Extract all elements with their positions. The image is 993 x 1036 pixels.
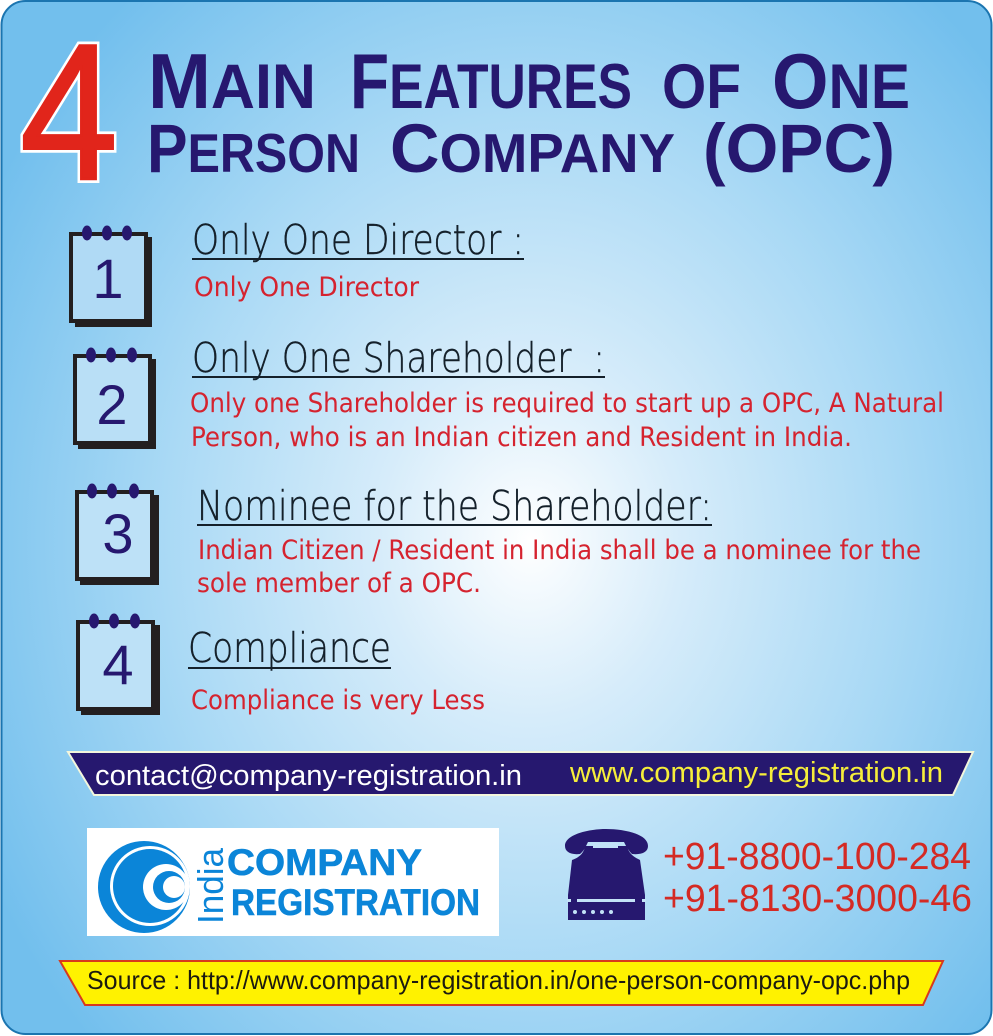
title: (OPC) <box>703 110 895 187</box>
item 3: description: sole member of a OPC. <box>197 568 481 599</box>
item 4: heading: Compliance <box>188 624 391 672</box>
item 1: calendar icon: 1 <box>92 247 124 310</box>
contact banner: contact@company-registration.in <box>95 760 522 792</box>
title: ONE <box>772 37 910 125</box>
contact banner <box>68 752 973 795</box>
logo: India Company Registration: COMPANY <box>227 842 422 883</box>
logo: India Company Registration <box>87 828 499 936</box>
title: MAIN <box>148 37 316 125</box>
item 3: heading: Nominee for the Shareholder: <box>197 482 712 530</box>
item 2: description <box>190 388 944 453</box>
big red numeral 4: 4 <box>20 4 118 221</box>
item 2: heading: Only One Shareholder : <box>192 334 605 382</box>
phone numbers <box>663 836 972 920</box>
logo: India Company Registration: REGISTRATION <box>231 882 480 923</box>
title: OF <box>662 52 741 122</box>
source banner: Source : http://www.company-registration.in/one-person-company-opc.php <box>87 965 910 995</box>
item 2: description: Person, who is an Indian citizen and Resident in India. <box>191 422 852 453</box>
title: PERSON <box>147 110 360 187</box>
item 1: heading: Only One Director : <box>192 216 524 264</box>
icon: logo swirl <box>98 841 190 933</box>
phone numbers: +91-8130-3000-46 <box>663 878 972 920</box>
item 1: description: Only One Director <box>194 272 420 303</box>
item 4: calendar icon <box>78 614 160 715</box>
contact banner: www.company-registration.in <box>569 757 943 789</box>
item 1: calendar icon <box>71 226 152 327</box>
phone numbers: +91-8800-100-284 <box>663 836 971 878</box>
logo: India Company Registration: India <box>190 847 231 924</box>
item 2: calendar icon <box>75 348 156 449</box>
item 3: description <box>197 535 921 599</box>
title: COMPANY <box>390 110 675 187</box>
title: FEATURES <box>350 37 632 125</box>
icon: telephone <box>565 829 648 920</box>
item 2: calendar icon: 2 <box>96 373 128 436</box>
item 3: description: Indian Citizen / Resident in India shall be a nominee for the <box>198 535 921 566</box>
item 3: calendar icon <box>77 484 159 585</box>
item 4: description: Compliance is very Less <box>191 685 485 716</box>
source banner <box>60 961 943 1005</box>
big red numeral 4: 4 <box>20 4 118 221</box>
item 4: calendar icon: 4 <box>102 633 134 696</box>
title <box>147 37 910 187</box>
item 3: calendar icon: 3 <box>102 502 134 565</box>
